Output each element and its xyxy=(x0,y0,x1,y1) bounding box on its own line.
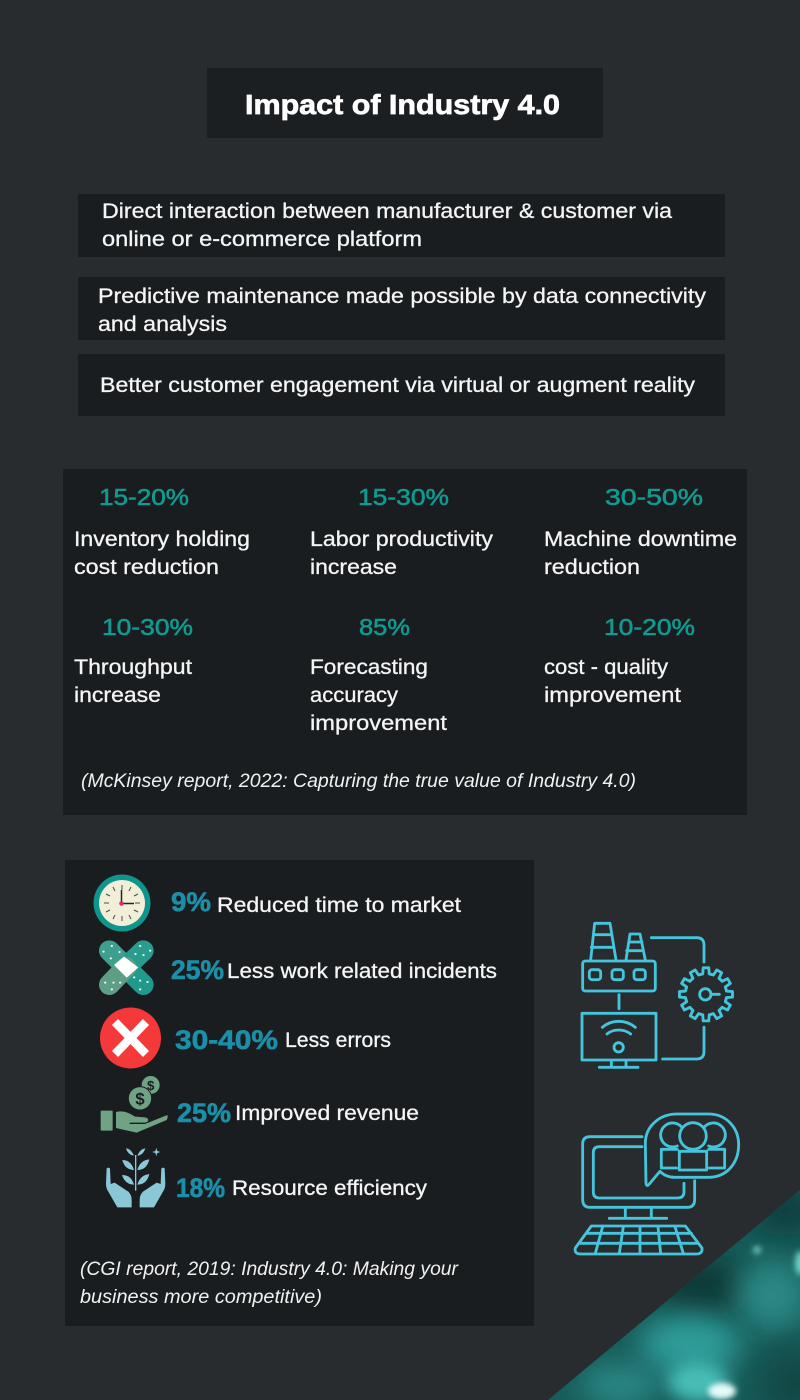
stat: labor productivity: Labor productivity xyxy=(310,528,494,551)
stat: labor productivity: increase xyxy=(310,556,397,579)
stat: time to market xyxy=(171,887,461,917)
source citation: CGI: (CGI report, 2019: Industry 4.0: Making your xyxy=(80,1259,459,1280)
stat: resource efficiency xyxy=(176,1173,428,1203)
panel: CGI statistics xyxy=(65,860,534,1326)
stat: machine downtime xyxy=(544,484,737,579)
stat: throughput xyxy=(74,614,193,707)
stat: forecasting accuracy xyxy=(310,614,447,735)
stat: work related incidents xyxy=(171,955,497,985)
icon: crossed bandages xyxy=(103,946,150,989)
stat: inventory holding xyxy=(74,484,250,579)
stat: cost quality: cost - quality xyxy=(544,656,669,679)
stat: machine downtime: Machine downtime xyxy=(544,528,737,551)
stat: time to market: Reduced time to market xyxy=(217,894,461,917)
panel: direct interaction xyxy=(78,194,725,257)
stat: resource efficiency: Resource efficiency xyxy=(232,1177,428,1200)
stat: cost quality: improvement xyxy=(544,684,681,707)
icon: hand with coins: $ xyxy=(147,1078,155,1093)
stat: inventory holding: Inventory holding xyxy=(74,528,250,551)
stat: throughput: 10-30% xyxy=(102,614,193,640)
stat: revenue: Improved revenue xyxy=(235,1102,419,1125)
stat: inventory holding: cost reduction xyxy=(74,556,219,579)
panel: McKinsey statistics xyxy=(63,469,747,815)
panel: predictive maintenance: Predictive maintenance made possible by data connectivity xyxy=(98,285,707,308)
panel: customer engagement: Better customer engagement via virtual or augment reality xyxy=(100,374,696,397)
stat: machine downtime: reduction xyxy=(544,556,640,579)
stat: labor productivity: 15-30% xyxy=(358,484,449,510)
icon: connected factory xyxy=(582,923,733,1067)
title xyxy=(207,68,603,138)
icon: hand with coins: $ xyxy=(135,1089,145,1108)
stat: errors: Less errors xyxy=(285,1029,391,1052)
decorative cloud triangle xyxy=(540,1180,800,1400)
stat: time to market: 9% xyxy=(171,887,211,917)
panel: direct interaction: Direct interaction between manufacturer & customer via xyxy=(102,200,672,223)
icon: clock xyxy=(94,874,150,932)
stat: work related incidents: 25% xyxy=(171,955,224,985)
stat: errors: 30-40% xyxy=(175,1025,278,1055)
panel: predictive maintenance xyxy=(78,277,725,340)
stat: cost quality xyxy=(544,614,695,707)
stat: forecasting accuracy: improvement xyxy=(310,712,447,735)
stat: throughput: Throughput xyxy=(74,656,192,679)
icon: red cross xyxy=(100,1008,161,1068)
icon: computer with group chat xyxy=(575,1114,739,1254)
icon: hands with plant xyxy=(106,1148,165,1207)
stat: resource efficiency: 18% xyxy=(176,1173,225,1203)
stat: throughput: increase xyxy=(74,684,161,707)
title: Impact of Industry 4.0 xyxy=(245,89,560,120)
stat: machine downtime: 30-50% xyxy=(605,484,703,510)
panel: predictive maintenance: and analysis xyxy=(98,313,227,336)
stat: cost quality: 10-20% xyxy=(604,614,695,640)
source citation: McKinsey: (McKinsey report, 2022: Capturing the true value of Industry 4.0) xyxy=(81,771,636,792)
source citation: CGI: business more competitive) xyxy=(80,1287,322,1308)
stat: forecasting accuracy: accuracy xyxy=(310,684,399,707)
stat: forecasting accuracy: Forecasting xyxy=(310,656,428,679)
source citation: CGI xyxy=(80,1259,459,1308)
stat: inventory holding: 15-20% xyxy=(99,484,189,510)
stat: forecasting accuracy: 85% xyxy=(359,614,410,640)
panel: direct interaction: online or e-commerce platform xyxy=(102,228,422,251)
icon: hand with coins xyxy=(101,1076,168,1133)
stat: revenue xyxy=(177,1098,419,1128)
panel: customer engagement xyxy=(78,354,725,416)
stat: errors xyxy=(175,1025,391,1055)
stat: work related incidents: Less work related incidents xyxy=(227,960,497,983)
stat: revenue: 25% xyxy=(177,1098,231,1128)
stat: labor productivity xyxy=(310,484,494,579)
